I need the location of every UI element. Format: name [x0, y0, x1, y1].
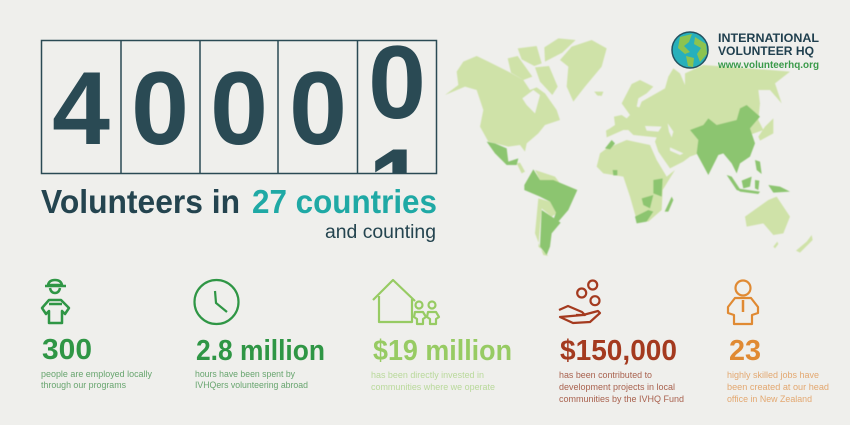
stat: head office jobs: [727, 280, 829, 404]
counter digits: 0: [131, 51, 189, 167]
stat: local employees: through our programs: [41, 380, 126, 390]
world map: [445, 38, 813, 256]
icon: worker: [42, 280, 69, 323]
stat: communities invested: [371, 280, 512, 392]
stat: IVHQ fund: $150,000: [560, 335, 677, 367]
stat: communities invested: communities where we operate: [371, 382, 495, 392]
logo: www.volunteerhq.org: [717, 59, 819, 71]
north america and arctic: [445, 38, 607, 152]
icon: person with tie: [728, 280, 758, 324]
stat: head office jobs: been created at our head: [727, 382, 829, 392]
stat: IVHQ fund: development projects in local: [559, 382, 675, 392]
icon: clock: [194, 280, 238, 324]
counter digits: 0: [289, 51, 347, 167]
icon: globe: [672, 32, 708, 68]
stat: hours volunteering: IVHQers volunteering abroad: [195, 380, 308, 390]
stat: head office jobs: office in New Zealand: [727, 394, 812, 404]
stat: communities invested: $19 million: [373, 335, 512, 367]
counter: [40, 40, 438, 174]
logo: [672, 31, 819, 71]
heading: and counting: [325, 222, 436, 243]
counter digits: [54, 45, 422, 173]
heading: [41, 183, 437, 243]
stat: hours volunteering: hours have been spent by: [195, 369, 295, 379]
counter frame: [42, 40, 436, 174]
counter digits: 1: [368, 128, 426, 244]
logo: INTERNATIONAL: [718, 31, 819, 45]
dark green countries: [487, 140, 790, 255]
stat: local employees: people are employed locally: [41, 369, 152, 379]
stat: communities invested: has been directly invested in: [371, 370, 484, 380]
icon: hand with coins: [559, 280, 600, 323]
stat: head office jobs: 23: [729, 335, 761, 367]
counter digits: 0: [368, 25, 426, 141]
eurasia: [595, 65, 790, 168]
heading: Volunteers in: [41, 183, 240, 220]
counter digits: 4: [52, 51, 110, 167]
icon: house and family: [373, 280, 439, 324]
counter digits: 0: [210, 51, 268, 167]
stat: IVHQ fund: communities by the IVHQ Fund: [559, 394, 684, 404]
stat: hours volunteering: 2.8 million: [196, 335, 325, 367]
logo: VOLUNTEER HQ: [718, 44, 814, 58]
stat: IVHQ fund: [559, 280, 684, 404]
southern continents, light green: [517, 118, 813, 256]
stat: head office jobs: highly skilled jobs have: [727, 370, 819, 380]
heading: 27 countries: [252, 183, 437, 220]
stat: local employees: [41, 280, 152, 390]
stat: hours volunteering: [194, 280, 325, 390]
stat: IVHQ fund: has been contributed to: [559, 370, 652, 380]
stat: local employees: 300: [42, 334, 92, 366]
china, india and southeast asia: [690, 105, 760, 175]
